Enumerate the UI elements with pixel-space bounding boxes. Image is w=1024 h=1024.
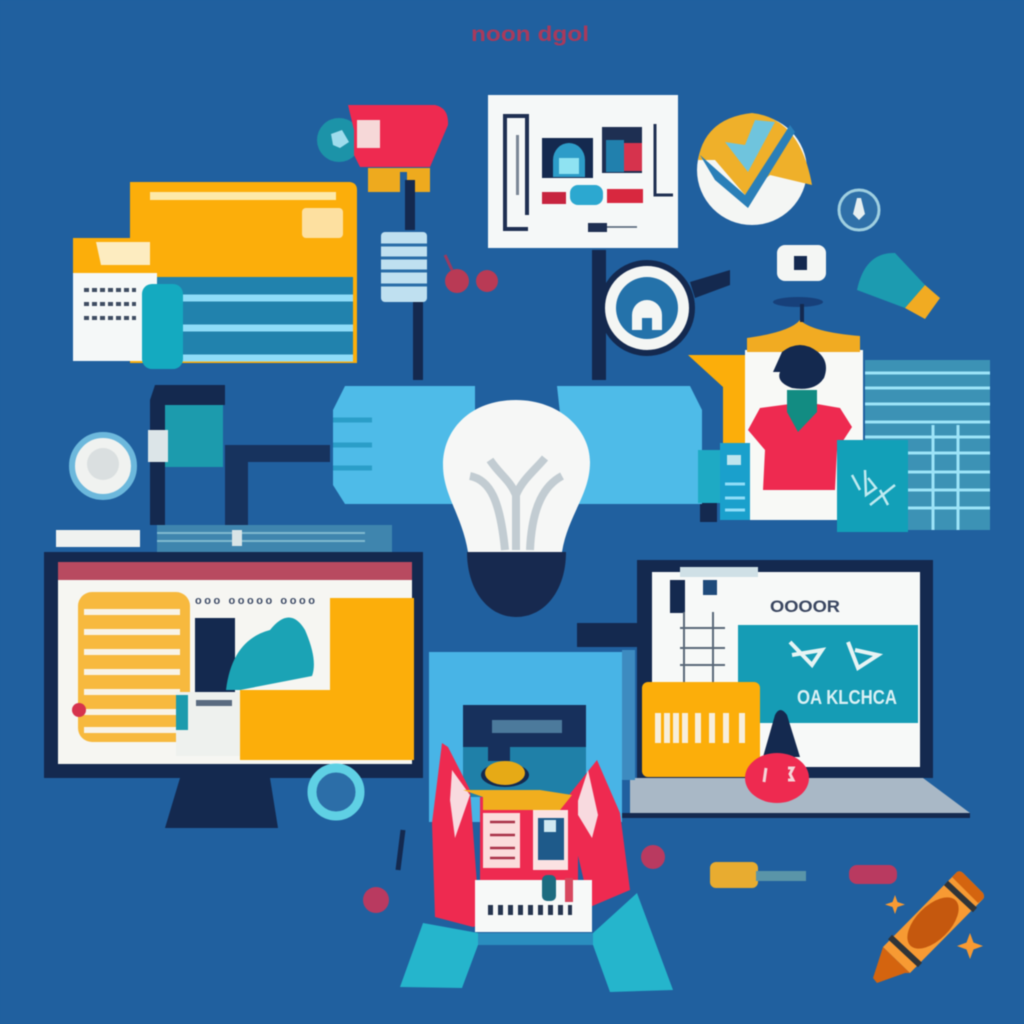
icon: red dots [363, 845, 897, 913]
icon: white tag [777, 245, 826, 281]
icon: teal bell [857, 253, 940, 319]
icon: teal ring [312, 768, 360, 816]
panel: blue book [429, 650, 635, 822]
icon: light bulb [443, 400, 590, 617]
icon: magnifier ring [592, 250, 730, 380]
panel: desktop monitor: ooo ooooo oooo [195, 595, 315, 607]
panel: blue data table [865, 360, 990, 530]
icon: red glasses [445, 255, 498, 293]
card: teal note [837, 440, 908, 532]
panel: laptop: OOOOR [770, 597, 840, 616]
icon: yellow key [710, 862, 806, 888]
panel: yellow folder with table [73, 182, 357, 369]
icon: small ring [839, 190, 879, 230]
panel: person card [688, 297, 863, 520]
left blue hand [333, 386, 475, 504]
card: small side tablet [700, 443, 750, 522]
icon: crayon logo [873, 871, 984, 983]
panel: desktop monitor [44, 552, 423, 828]
panel: laptop [577, 560, 970, 818]
striped desk bar [157, 525, 392, 553]
panel: top poster [488, 95, 678, 248]
right blue hand [557, 386, 720, 504]
top caption: noon dgol [471, 23, 589, 46]
icon: red glove on stand [317, 105, 448, 380]
panel: hands holding tablet [398, 705, 673, 992]
small white label [56, 530, 140, 547]
panel: laptop: OA KLCHCA [797, 687, 897, 709]
arm with ring on left [72, 385, 330, 525]
icon: check badge [697, 113, 812, 225]
